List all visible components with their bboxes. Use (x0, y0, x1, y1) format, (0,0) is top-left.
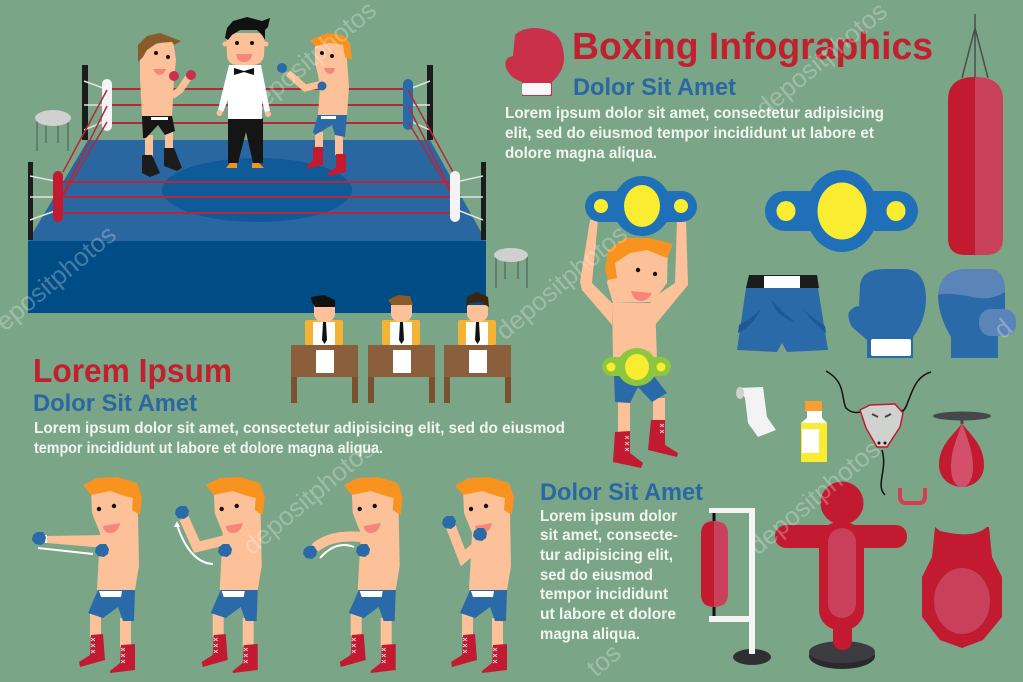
champion boots (613, 431, 643, 468)
text block left: Lorem ipsum dolor sit amet, consectetur adipisicing elit, sed do eiusmod (34, 420, 565, 437)
icon: chest protector (922, 527, 1002, 648)
boxer stance: hook (303, 477, 403, 673)
text block right: sit amet, consecte- (540, 527, 678, 544)
icon: training dummy (775, 482, 907, 669)
stool right (494, 248, 528, 288)
judge 3 (444, 292, 511, 403)
text block top (505, 105, 884, 162)
boxer stance: guard (442, 477, 514, 673)
boxer stance: straight punch (32, 477, 142, 673)
champion legs (618, 398, 665, 433)
icon: hand wrap (736, 387, 776, 437)
text block top: Lorem ipsum dolor sit amet, consectetur adipisicing (505, 105, 884, 122)
subheading: Dolor Sit Amet right: Dolor Sit Amet (540, 479, 703, 506)
text block left (34, 420, 565, 457)
icon: red glove (505, 28, 564, 96)
front posts (28, 162, 486, 240)
watermarks: depositphotos (490, 219, 633, 346)
referee (216, 17, 271, 168)
subheading: Dolor Sit Amet top: Dolor Sit Amet (573, 74, 736, 101)
icon: heavy bag (948, 14, 1003, 255)
text block left: tempor incididunt ut labore et dolore magna aliqua. (34, 440, 383, 457)
text block top: dolore magna aliqua. (505, 145, 657, 162)
ring front apron (28, 241, 486, 313)
watermarks: depositphotos (743, 434, 886, 561)
icon: groin guard (826, 371, 931, 495)
text block right: magna aliqua. (540, 626, 640, 643)
ring back posts (82, 65, 433, 140)
text block right: tempor incididunt (540, 586, 668, 603)
watermarks: d (988, 312, 1018, 345)
referee shirt (218, 65, 270, 119)
text block top: elit, sed do eiusmod tempor incididunt ut labore et (505, 125, 874, 142)
referee trousers (228, 118, 263, 163)
text block right (540, 508, 678, 643)
post straps back (84, 81, 430, 130)
boxer in blue shorts (277, 33, 352, 176)
text block right: Lorem ipsum dolor (540, 508, 677, 525)
side ropes (63, 90, 453, 196)
front ropes (60, 182, 452, 213)
front corner pads (53, 171, 63, 222)
boxing ring (28, 65, 486, 313)
icon: blue glove side (938, 269, 1016, 358)
text block right: tur adipisicing elit, (540, 547, 673, 564)
ring front ropes and corners (28, 90, 486, 240)
bow tie (234, 68, 254, 75)
champion shorts (614, 375, 667, 403)
watermarks: tos (581, 637, 626, 682)
held belt (585, 191, 697, 222)
icon: standing bag (701, 508, 771, 665)
judge 2 (368, 295, 435, 403)
champion head (607, 243, 668, 303)
referee hair (225, 17, 270, 40)
title: Boxing Infographics (572, 26, 933, 68)
icon: title belt (765, 170, 918, 252)
stool left (35, 110, 71, 151)
icon: blue glove (848, 269, 926, 358)
back ropes (110, 89, 405, 123)
subheading: Dolor Sit Amet left: Dolor Sit Amet (33, 390, 197, 417)
champion arms (580, 220, 612, 325)
heading: Lorem Ipsum: Lorem Ipsum (33, 352, 232, 389)
back corner pads (102, 79, 112, 131)
champion boxer (580, 176, 697, 468)
ring floor (28, 140, 486, 241)
judge 1 (291, 295, 358, 403)
text block right: ut labore et dolore (540, 606, 676, 623)
champion torso (612, 303, 657, 360)
green belt (602, 357, 671, 376)
boxer stance: uppercut (174, 477, 265, 673)
icon: speed bag (933, 412, 991, 487)
text block right: sed do eiusmod (540, 567, 653, 584)
boxer in black shorts (138, 33, 196, 177)
icon: blue shorts (737, 275, 828, 352)
icon: bottle (801, 401, 827, 462)
watermarks: depositphotos (237, 434, 380, 561)
centre circle (162, 158, 352, 222)
icon: mouth guard (900, 488, 925, 503)
referee head (226, 33, 265, 65)
